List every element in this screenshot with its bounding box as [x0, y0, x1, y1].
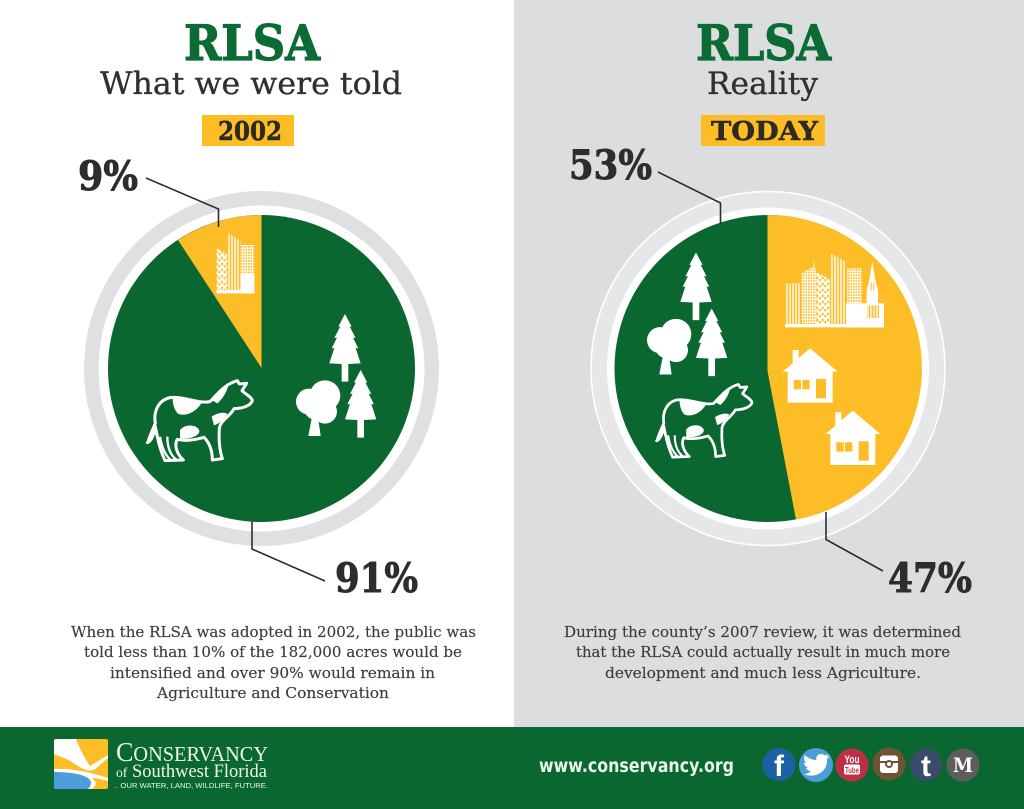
icon: city skyline — [785, 253, 884, 327]
text block: left description: When the RLSA was adopted in 2002, the public was — [71, 625, 476, 641]
icon: house upper — [783, 348, 838, 403]
logo wordmark — [114, 737, 268, 790]
icon: tumblr — [910, 749, 942, 783]
text block: left description: intensified and over 90% would remain in — [110, 666, 435, 682]
text block: right description — [564, 625, 961, 682]
pie chart: 2002 — [84, 191, 439, 546]
text block: right description: that the RLSA could actually result in much more — [576, 645, 950, 661]
website url: www.conservancy.org — [539, 756, 734, 777]
logo wordmark: of Southwest Florida — [116, 761, 268, 782]
icon: facebook — [762, 748, 796, 783]
icon: tumblr: t — [921, 750, 931, 783]
icon: twitter — [799, 748, 833, 782]
heading: RLSA right: RLSA — [696, 14, 832, 72]
icon: medium — [946, 748, 980, 782]
label: 47 percent: 47% — [888, 555, 972, 602]
pie slice: 47 percent — [768, 215, 922, 520]
panel: what we were told — [71, 14, 476, 702]
footer band — [0, 727, 1024, 809]
icon: buildings — [217, 233, 254, 293]
icon: trees — [296, 314, 376, 438]
social icons — [762, 748, 980, 783]
leader line: 91 percent — [252, 521, 325, 581]
icon: cow — [147, 381, 252, 461]
leader line: 53 percent — [658, 172, 720, 224]
logo mark — [54, 739, 108, 789]
pie chart: today — [591, 192, 945, 546]
label: 53 percent: 53% — [569, 142, 652, 189]
logo wordmark: CONSERVANCY — [116, 737, 268, 767]
logo wordmark: .. OUR WATER, LAND, WILDLIFE, FUTURE. — [114, 781, 268, 790]
year tag: today: TODAY — [711, 117, 818, 147]
text block: left description: told less than 10% of the 182,000 acres would be — [84, 645, 462, 661]
icon: house lower — [825, 411, 880, 465]
heading: RLSA left: RLSA — [184, 14, 321, 72]
icon: youtube: Tube — [845, 765, 859, 775]
icon: cow — [657, 384, 752, 457]
icon: instagram — [872, 748, 906, 780]
label: 91 percent: 91% — [335, 555, 418, 602]
text block: right description: development and much less Agriculture. — [605, 666, 921, 682]
panel: right background — [514, 0, 1024, 728]
pie slice: 9 percent — [178, 215, 262, 368]
subheading: reality: Reality — [707, 66, 818, 102]
text block: left description: Agriculture and Conservation — [156, 686, 389, 702]
text block: right description: During the county’s 2007 review, it was determined — [564, 625, 961, 641]
icon: youtube — [836, 748, 868, 782]
label: 9 percent: 9% — [78, 153, 138, 200]
panel: reality — [564, 14, 972, 682]
icon: youtube: You — [844, 754, 860, 766]
icon: facebook: f — [774, 750, 785, 783]
leader line: 9 percent — [146, 178, 218, 227]
text block: left description — [71, 625, 476, 702]
subheading: what we were told: What we were told — [100, 66, 402, 102]
icon: medium: M — [953, 753, 973, 777]
year tag: 2002: 2002 — [218, 117, 282, 147]
icon: trees — [647, 252, 727, 376]
leader line: 47 percent — [826, 512, 883, 571]
